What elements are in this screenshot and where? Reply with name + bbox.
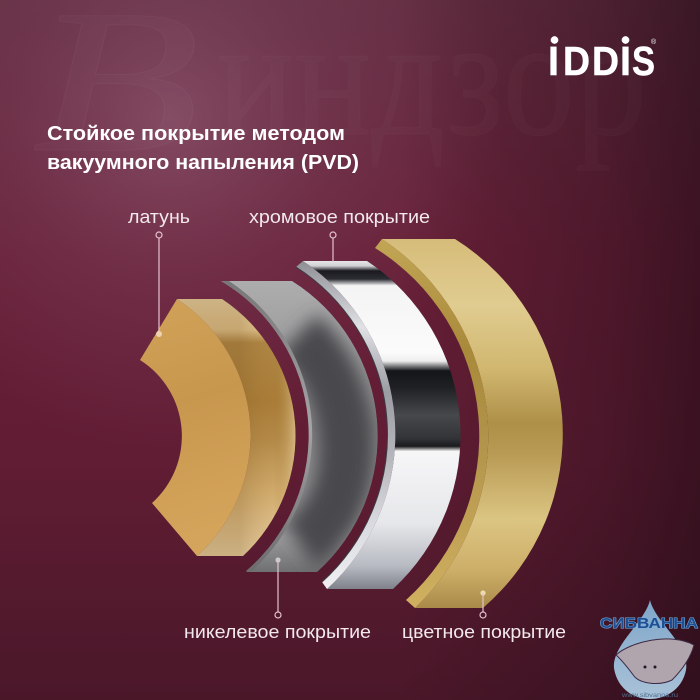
logo: iddis: I xyxy=(548,38,559,84)
label: nickel coating: никелевое покрытие xyxy=(184,622,371,642)
layer: colored coating xyxy=(375,239,563,608)
label: brass xyxy=(128,207,190,337)
logo: iddis: D xyxy=(563,38,590,84)
stamp: sibvanna: www.sibvanna.ru xyxy=(621,693,678,699)
layer: brass xyxy=(140,299,295,556)
stamp: sibvanna xyxy=(600,600,698,699)
logo: iddis: I xyxy=(620,38,631,84)
label: chrome coating: хромовое покрытие xyxy=(249,207,430,227)
logo: iddis: ® xyxy=(651,38,657,46)
layer: chrome coating xyxy=(296,261,461,589)
title: вакуумного напыления (PVD) xyxy=(47,152,359,174)
watermark: Виндзор xyxy=(32,0,647,195)
logo: iddis: S xyxy=(632,38,655,84)
label: colored coating: цветное покрытие xyxy=(402,622,566,642)
label: nickel coating xyxy=(184,557,371,642)
title: Стойкое покрытие методом xyxy=(47,123,345,145)
stamp: sibvanna: СИБВАННА xyxy=(600,615,698,632)
layer: nickel coating xyxy=(221,281,378,572)
label: brass: латунь xyxy=(128,207,190,227)
logo: iddis xyxy=(548,36,657,84)
label: colored coating xyxy=(402,590,566,642)
logo: iddis: D xyxy=(592,38,619,84)
title xyxy=(47,123,359,174)
label: chrome coating xyxy=(249,207,430,262)
